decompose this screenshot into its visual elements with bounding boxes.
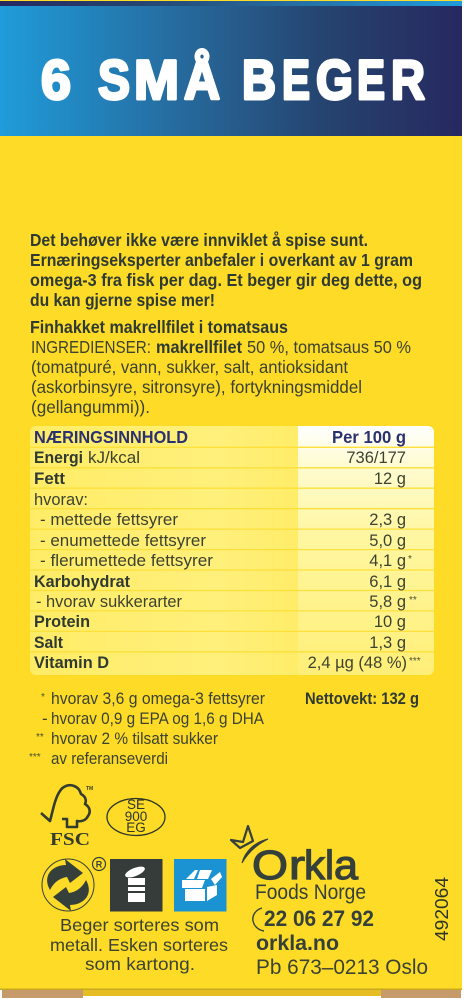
table rows: Fett [34, 469, 65, 488]
footnotes: ** [36, 732, 44, 743]
heading: 6 [41, 48, 71, 111]
net weight: Nettovekt: 132 g [305, 689, 419, 708]
recycling text: metall. Esken sorteres [50, 935, 228, 955]
product code: 492064 [432, 877, 452, 941]
box bottom edge [0, 988, 462, 998]
icon: SE 900 EG oval mark: 900 [125, 809, 147, 824]
icon: SE 900 EG oval mark [107, 797, 165, 836]
table rows: - flerumettede fettsyrer [40, 551, 213, 570]
table rows: - enumettede fettsyrer [40, 531, 206, 550]
contact details [253, 906, 428, 979]
table rows: 10 g [374, 613, 406, 631]
table rows: Salt [34, 633, 63, 652]
heading: E [282, 48, 310, 111]
contact details: 22 06 27 92 [264, 906, 374, 931]
heading: S [98, 48, 130, 111]
table rows: ** [409, 595, 417, 606]
icon: Orkla star [231, 826, 268, 863]
icon: FSC logo: FSC [50, 829, 90, 849]
heading: E [357, 48, 385, 111]
wordmark: a [334, 842, 358, 888]
table rows: Protein [34, 612, 90, 631]
icon: green dot recycling mark: R [96, 860, 103, 870]
intro text: omega-3 fra fisk per dag. Et beger gir deg dette, og [30, 270, 422, 290]
footnotes: hvorav 0,9 g EPA og 1,6 g DHA [51, 709, 265, 728]
heading [41, 48, 425, 111]
wordmark: r [289, 842, 305, 888]
table header [34, 427, 406, 447]
footnotes: *** [29, 752, 41, 763]
table rows: kJ/kcal [88, 448, 140, 467]
table rows: 5,0 g [369, 532, 406, 550]
footnotes: hvorav 2 % tilsatt sukker [51, 729, 218, 748]
table rows: - hvorav sukkerarter [36, 592, 182, 611]
table header: Per 100 g [332, 427, 406, 447]
intro text: Det behøver ikke være innviklet å spise sunt. [30, 230, 368, 250]
table rows: 1,3 g [369, 634, 406, 652]
ingredients: Finhakket makrellfilet i tomatsaus [30, 317, 288, 337]
Orkla logo [231, 826, 366, 904]
heading: M [134, 48, 179, 111]
table rows: - mettede fettsyrer [40, 510, 178, 529]
table rows: * [408, 554, 412, 565]
table rows: 2,4 µg (48 %) [308, 654, 407, 672]
table rows: 4,1 g [369, 552, 406, 570]
table rows: Karbohydrat [34, 572, 130, 591]
icon: green dot recycling mark [42, 858, 106, 911]
icon: FSC logo: TM [86, 786, 93, 792]
wordmark: k [304, 842, 326, 888]
table rows: 6,1 g [369, 573, 406, 591]
ingredients: makrellfilet [156, 337, 242, 357]
wordmark: O [252, 842, 288, 888]
footnotes: * [41, 692, 45, 703]
header band [0, 1, 462, 136]
intro text [30, 230, 422, 310]
table rows: 12 g [374, 470, 406, 488]
table rows: Energi [34, 448, 83, 467]
recycling text [50, 915, 228, 974]
intro text: Ernæringseksperter anbefaler i overkant av 1 gram [30, 250, 413, 270]
heading: Å [184, 48, 220, 111]
Orkla logo: Foods Norge [255, 881, 366, 904]
footnotes [29, 689, 265, 768]
icon: phone [253, 908, 264, 931]
table rows: hvorav: [34, 490, 88, 509]
table header: NÆRINGSINNHOLD [34, 427, 188, 447]
heading: B [242, 48, 276, 111]
footnotes: - [42, 709, 48, 728]
icon: metal sorting [110, 859, 162, 912]
recycling text: Beger sorteres som [60, 915, 219, 935]
contact details: orkla.no [256, 932, 339, 955]
icon: carton sorting [174, 859, 226, 912]
recycling text: som kartong. [85, 954, 195, 974]
ingredients [30, 317, 411, 417]
icon: FSC logo [41, 785, 93, 849]
table rows: 2,3 g [369, 511, 406, 529]
ingredients: (askorbinsyre, sitronsyre), fortykningsmiddel [31, 377, 362, 397]
intro text: du kan gjerne spise mer! [30, 290, 215, 310]
ingredients: (gellangummi)). [31, 397, 150, 417]
table rows: Vitamin D [34, 653, 109, 672]
footnotes: av referanseverdi [51, 749, 168, 768]
contact details: Pb 673–0213 Oslo [256, 956, 428, 979]
heading: G [316, 48, 353, 111]
table rows: *** [409, 656, 421, 667]
ingredients: INGREDIENSER: [31, 337, 151, 357]
icon: SE 900 EG oval mark: EG [126, 820, 146, 835]
wordmark: l [325, 842, 334, 888]
nutrition table [30, 426, 434, 675]
icon: SE 900 EG oval mark: SE [127, 797, 145, 812]
heading: R [391, 48, 425, 111]
table rows: 736/177 [346, 449, 406, 467]
table rows: 5,8 g [369, 593, 406, 611]
ingredients: (tomatpuré, vann, sukker, salt, antioksidant [31, 357, 348, 377]
wordmark [252, 842, 358, 888]
ingredients: 50 %, tomatsaus 50 % [247, 337, 411, 357]
footnotes: hvorav 3,6 g omega-3 fettsyrer [51, 689, 265, 708]
table rows [34, 448, 421, 672]
